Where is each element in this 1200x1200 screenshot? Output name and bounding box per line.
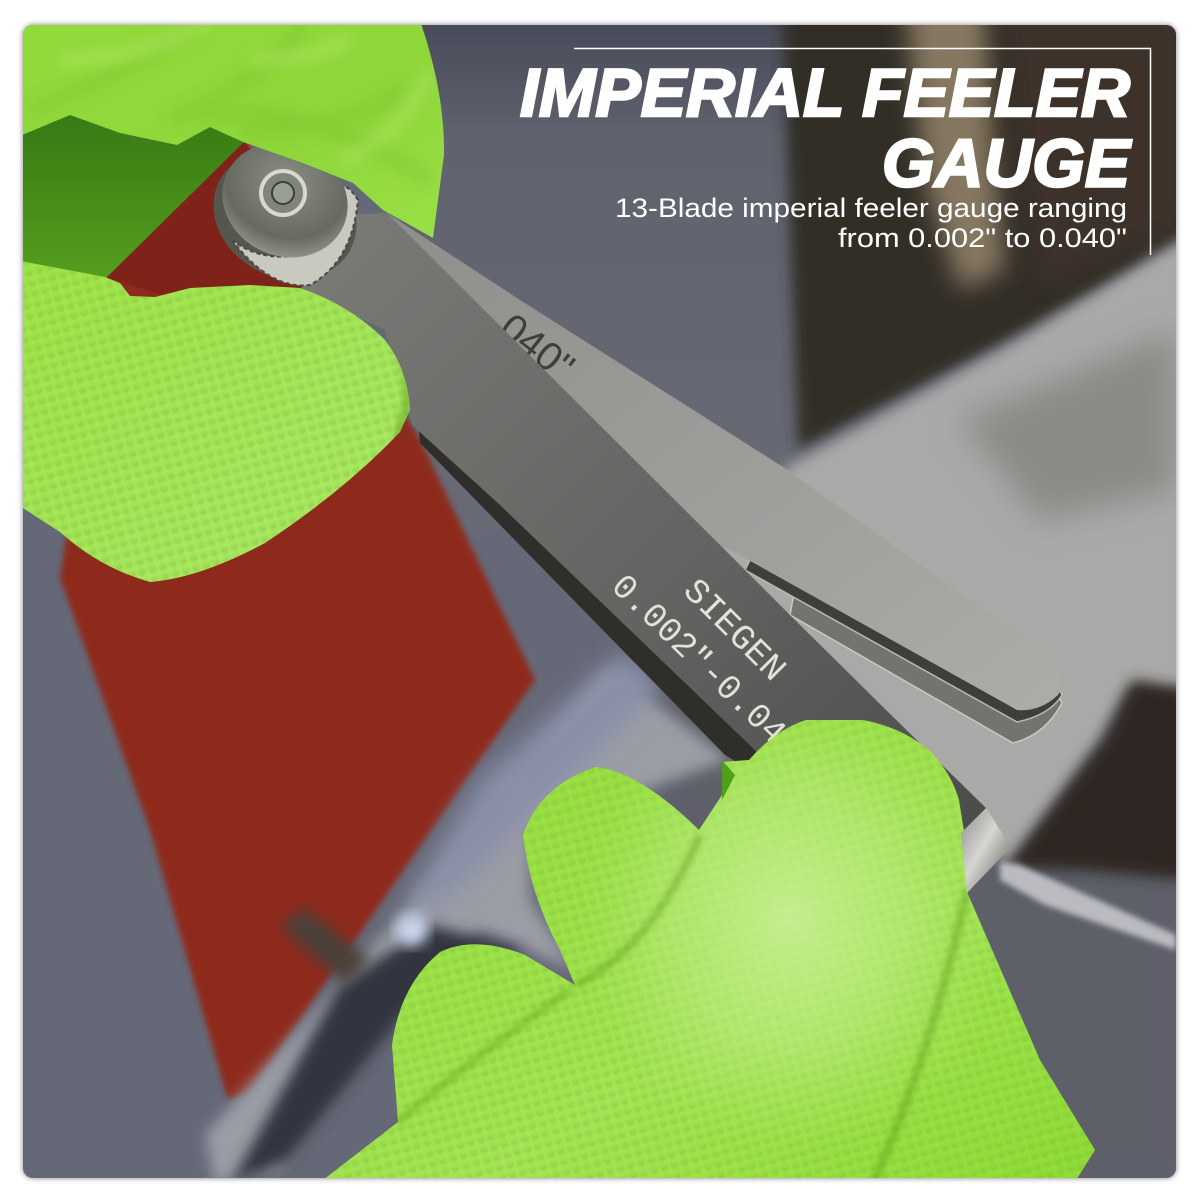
glove: lower hand (326, 720, 1095, 1178)
engraved back size: .040" (482, 298, 582, 390)
chrome tool (205, 668, 730, 1185)
title: IMPERIAL FEELER (520, 55, 1130, 131)
subtitle: from 0.002" to 0.040" (838, 223, 1127, 253)
title: GAUGE (882, 126, 1133, 202)
front blade (300, 213, 986, 880)
third blade in stack (790, 598, 1063, 744)
subtitle (615, 193, 1127, 253)
glove: thumb (15, 255, 415, 585)
title (520, 55, 1133, 202)
dark brown machinery (782, 0, 1190, 450)
engraved front labels (614, 576, 787, 741)
lower blade edge (418, 420, 765, 767)
red panel (60, 135, 535, 1100)
back blade (387, 213, 1062, 710)
metal ring (961, 808, 1011, 893)
grey machine block (700, 235, 1190, 868)
glove: upper hand (15, 15, 455, 279)
subtitle: 13-Blade imperial feeler gauge ranging (615, 193, 1127, 223)
title frame (574, 48, 1150, 255)
engraved front labels: SIEGEN (674, 571, 793, 690)
feeler gauge (191, 122, 1062, 880)
second blade in stack (744, 560, 1062, 723)
engraved front labels: 0.002"-0.040" (602, 567, 823, 782)
knurled pivot nut (214, 147, 359, 286)
